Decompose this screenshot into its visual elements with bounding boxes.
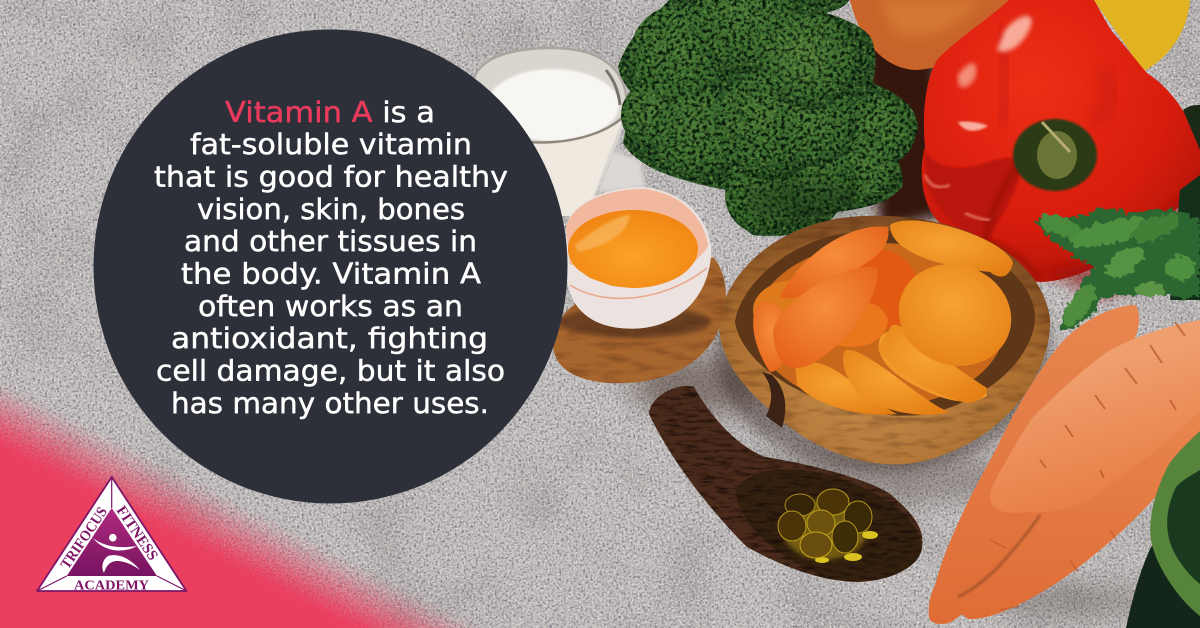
photo: parsley sprig [1034, 175, 1200, 330]
vitamin A description text: has many other uses. [171, 387, 489, 420]
logo: Trifocus Fitness Academy: ACADEMY [74, 578, 149, 594]
vitamin A description text: antioxidant, fighting [171, 322, 488, 355]
vitamin A description text [154, 96, 508, 420]
vitamin A description text: the body. Vitamin A [181, 258, 482, 290]
vitamin A description text: vision, skin, bones [197, 193, 465, 226]
photo: glass of milk [473, 47, 645, 216]
photo: wooden spoon with capsules [649, 386, 923, 582]
vitamin A description text: and other tissues in [184, 225, 477, 258]
logo: Trifocus Fitness Academy [37, 477, 186, 594]
vitamin A description text: that is good for healthy [154, 160, 508, 194]
logo: Trifocus Fitness Academy: FITNESS [113, 503, 161, 564]
vitamin A description text: cell damage, but it also [156, 354, 505, 388]
capsules [778, 489, 878, 563]
photo: red bell pepper [922, 0, 1200, 300]
logo figure [93, 534, 140, 573]
photo: bowl of dried apricots [715, 216, 1051, 472]
logo: Trifocus Fitness Academy: TRIFOCUS [58, 504, 111, 572]
vitamin A description text: Vitamin A is a [225, 96, 435, 129]
text circle panel [94, 30, 568, 504]
photo: orange and yellow fruit [850, 0, 1190, 230]
photo: carrots [929, 305, 1200, 624]
vitamin A description text: fat-soluble vitamin [190, 128, 472, 161]
photo: dark green leaf [1126, 105, 1200, 628]
photo: broccoli [618, 0, 918, 236]
pepper stem [1013, 119, 1097, 191]
apricots [753, 220, 1026, 415]
photo: egg in small wooden bowl [553, 187, 726, 383]
pink grainy corner wash [0, 340, 620, 628]
vitamin A description text: often works as an [198, 290, 463, 323]
